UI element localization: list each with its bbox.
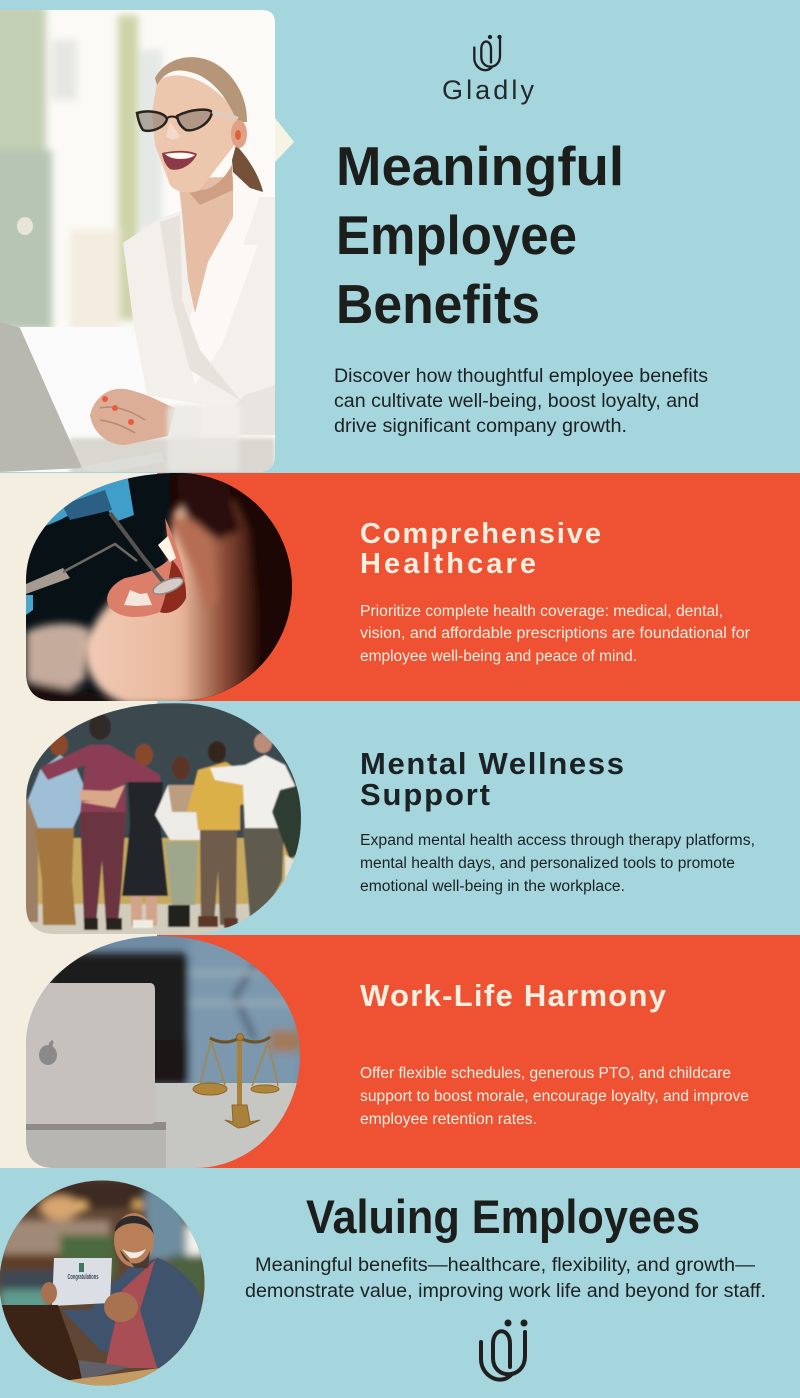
title: Meaningful [336, 135, 624, 197]
heading: Mental Wellness Support: Support [360, 777, 490, 812]
glasses [137, 110, 212, 131]
man's jacket [62, 1258, 202, 1368]
person 2 [89, 714, 111, 740]
photo: dentist examining teeth [26, 473, 296, 705]
intro text [334, 366, 708, 437]
text: healthcare description: vision, and affordable prescriptions are foundational for [360, 625, 750, 642]
wordmark: Gladly [442, 75, 534, 105]
intro text: can cultivate well-being, boost loyalty, and [334, 391, 699, 412]
face [114, 1213, 154, 1267]
text: mental wellness description [360, 832, 755, 895]
hands [90, 389, 175, 445]
text: conclusion: Meaningful benefits—healthcare, flexibility, and growth— [255, 1255, 755, 1276]
text: work-life description: employee retention rates. [360, 1111, 537, 1128]
title: Employee [336, 204, 577, 266]
text: mental wellness description: Expand mental health access through therapy platforms, [360, 832, 755, 849]
laptop lid [20, 983, 155, 1124]
lip and mouth [107, 518, 186, 617]
shirt [105, 1260, 157, 1368]
ponytail [232, 145, 263, 192]
teal band: mental wellness [157, 701, 800, 935]
intro text: Discover how thoughtful employee benefits [334, 366, 708, 387]
orange band: work-life [157, 935, 800, 1168]
person 3 [135, 744, 153, 766]
background shoulder [26, 617, 115, 701]
logo: Gladly [442, 36, 534, 105]
certificate: Congratulations [68, 1274, 99, 1281]
icon: Gladly mark footer [481, 1322, 526, 1380]
person 6 [254, 733, 272, 753]
desk and laptop [20, 327, 124, 336]
instruments [26, 568, 70, 594]
laptop [0, 1305, 85, 1380]
face [152, 75, 238, 192]
smile [162, 151, 197, 170]
heading: Work-Life Harmony: Work-Life Harmony [360, 978, 667, 1013]
water glass [167, 405, 240, 472]
arm across [80, 790, 118, 801]
hair [155, 57, 247, 122]
title [336, 135, 624, 335]
gloves [46, 478, 134, 526]
text: work-life description [360, 1065, 749, 1128]
icon: Gladly mark [474, 36, 500, 70]
heading: Comprehensive Healthcare: Healthcare [360, 548, 536, 580]
title: Benefits [336, 273, 540, 335]
person 5 [208, 741, 226, 763]
hands [41, 1282, 57, 1304]
golden scales [193, 1034, 279, 1128]
text: healthcare description: employee well-being and peace of mind. [360, 648, 637, 665]
heading: Mental Wellness Support [360, 746, 624, 812]
logo on laptop [39, 1040, 57, 1065]
photo: smiling man holding congratulations certificate [0, 1180, 206, 1395]
ear [231, 120, 247, 148]
heading: Comprehensive Healthcare [360, 518, 601, 580]
photo: laptop and golden scales [20, 936, 306, 1168]
text: mental wellness description: mental health days, and personalized tools to promote [360, 855, 735, 872]
orange band: healthcare [157, 473, 800, 701]
nose [166, 122, 180, 139]
jacket [123, 197, 275, 404]
heading: Mental Wellness Support: Mental Wellness [360, 746, 624, 781]
cream left strip [0, 473, 157, 1168]
text: healthcare description [360, 603, 750, 665]
heading: Comprehensive Healthcare: Comprehensive [360, 518, 601, 550]
face skin [84, 473, 259, 705]
text: work-life description: support to boost morale, encourage loyalty, and improve [360, 1088, 749, 1105]
intro text: drive significant company growth. [334, 416, 627, 437]
text: conclusion: demonstrate value, improving work life and beyond for staff. [245, 1281, 766, 1302]
person far left [24, 800, 38, 922]
text: work-life description: Offer flexible schedules, generous PTO, and childcare [360, 1065, 731, 1082]
text: conclusion [245, 1255, 766, 1302]
text: healthcare description: Prioritize complete health coverage: medical, dental, [360, 603, 723, 620]
certificate [52, 1258, 112, 1306]
photo: laughing woman at desk [0, 5, 300, 478]
neck and chest [178, 177, 233, 313]
person 4 [172, 756, 190, 780]
teeth [158, 536, 176, 562]
heading: Valuing Employees: Valuing Employees [306, 1190, 700, 1243]
photo: team with arms around each other [24, 703, 306, 936]
person 1 [50, 734, 68, 756]
text: mental wellness description: emotional well-being in the workplace. [360, 878, 625, 895]
dark cheek [170, 473, 296, 701]
